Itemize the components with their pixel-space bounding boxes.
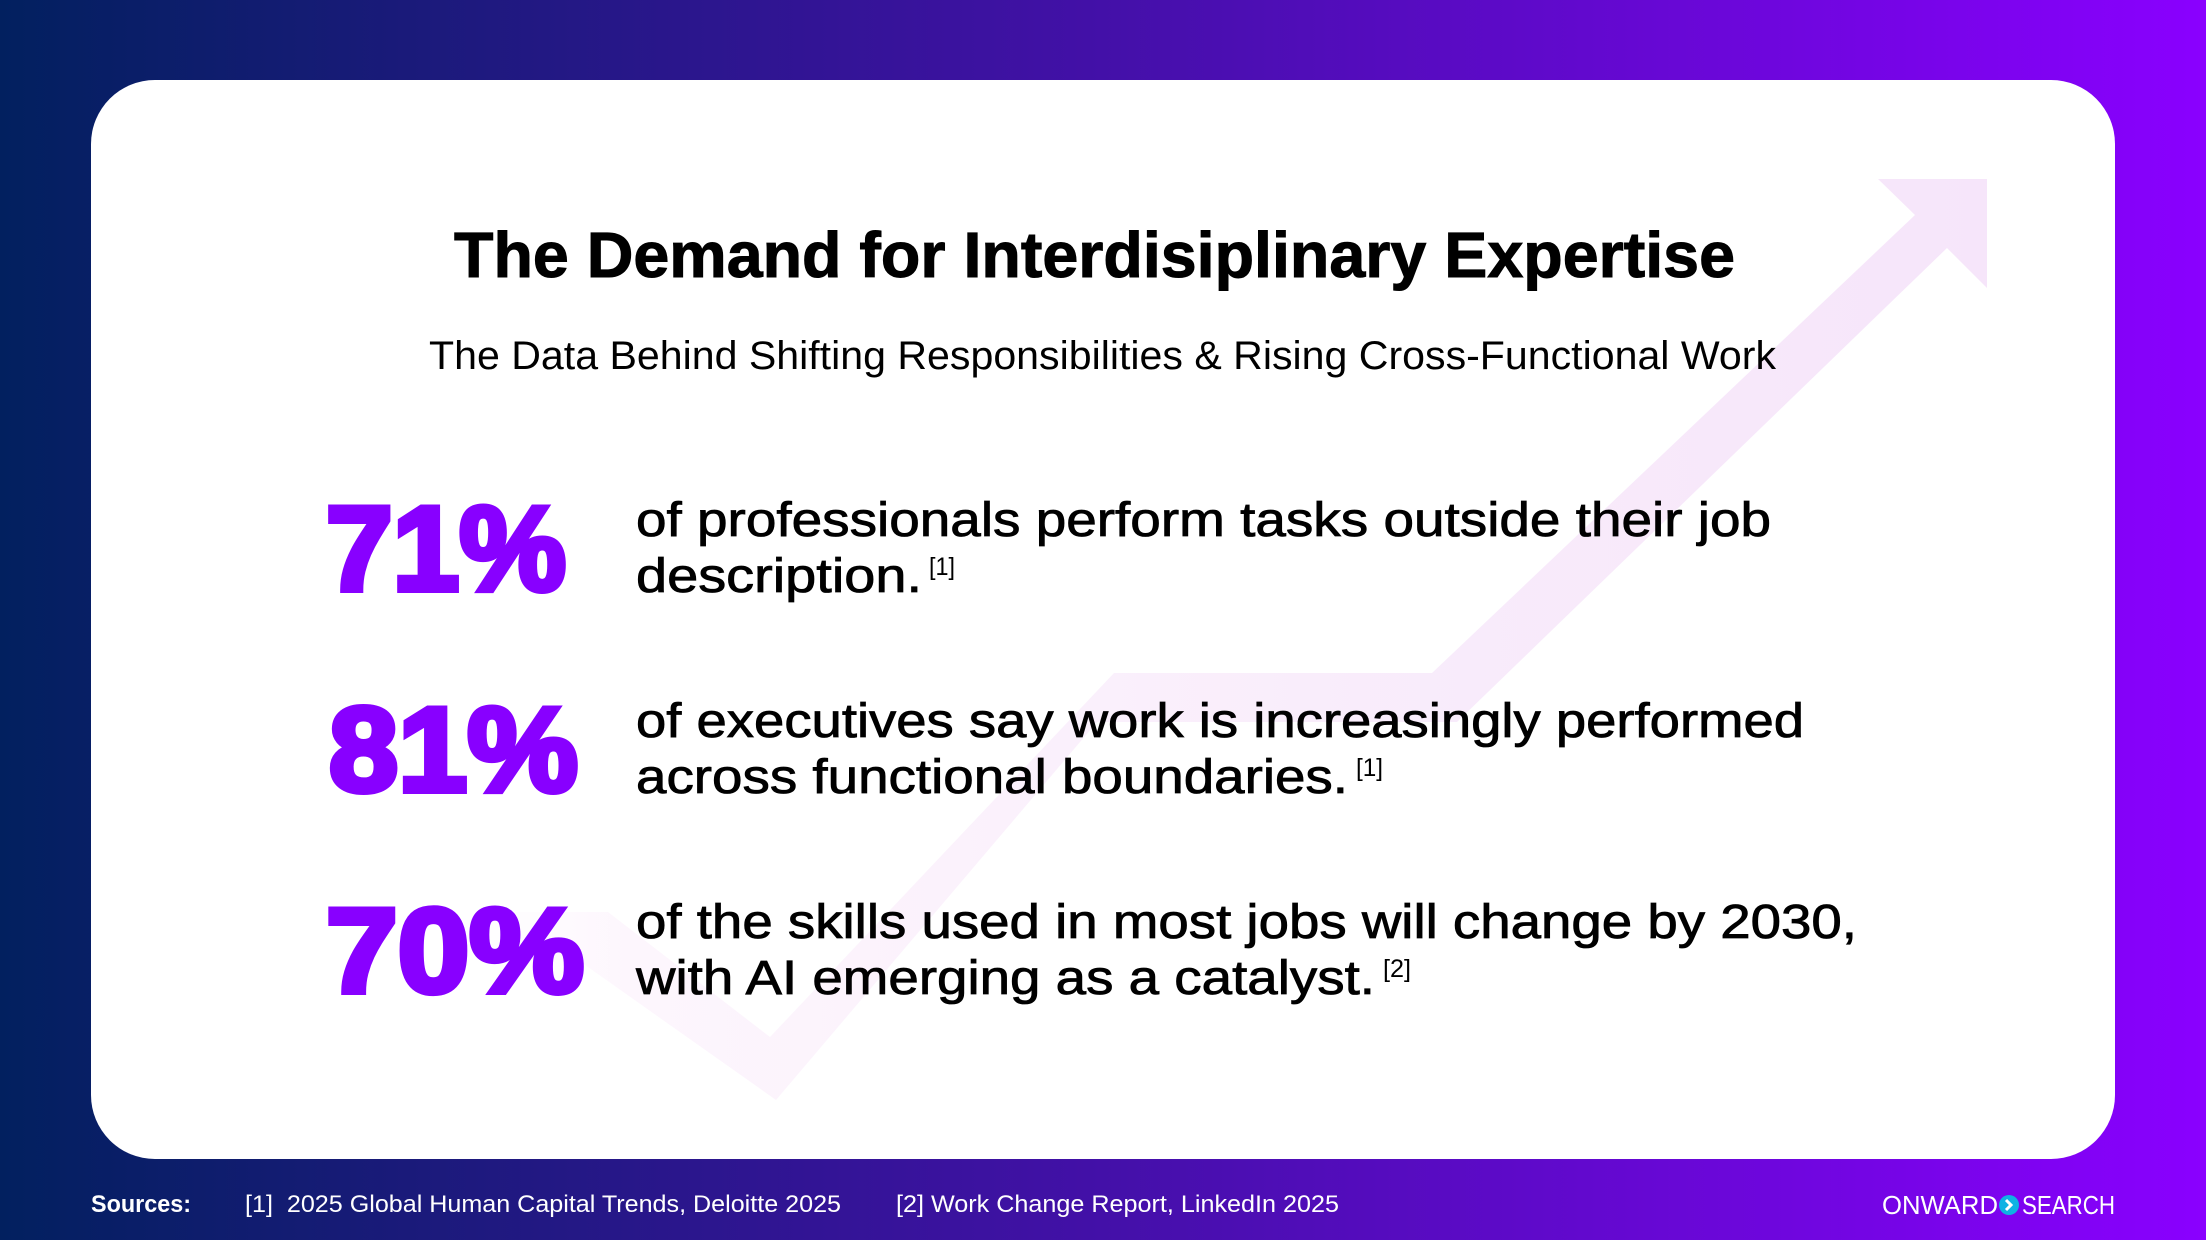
- stat text 70%: [635, 896, 1857, 1005]
- logo: Onward Search: [1882, 1190, 2115, 1220]
- stat text 70%: with AI emerging as a catalyst.: [635, 952, 1375, 1005]
- citation marker 3: [2]: [1383, 955, 1411, 983]
- stat: 81%: [329, 683, 1804, 817]
- citation marker 1: [1]: [929, 553, 955, 581]
- stat text 81%: of executives say work is increasingly performed: [636, 695, 1804, 748]
- logo word SEARCH: SEARCH: [2022, 1190, 2115, 1220]
- source 2: [2] Work Change Report, LinkedIn 2025: [896, 1191, 1339, 1218]
- sources label: Sources:: [91, 1191, 191, 1218]
- stat text 71%: of professionals perform tasks outside their job: [636, 494, 1771, 547]
- sources footer: [91, 1191, 1339, 1218]
- icon: rising arrow watermark: [480, 179, 1987, 1100]
- stat: 70%: [326, 884, 1857, 1018]
- white card panel: [91, 80, 2115, 1159]
- logo chevron circle: [1999, 1195, 2019, 1215]
- stat text 71%: description.: [636, 550, 922, 603]
- title: The Demand for Interdisiplinary Expertise: [454, 219, 1735, 291]
- stat text 70%: of the skills used in most jobs will change by 2030,: [636, 896, 1857, 949]
- stat number 70%: 70%: [326, 884, 584, 1018]
- stat text 81%: [636, 695, 1804, 804]
- stat number 81%: 81%: [329, 683, 578, 817]
- stat text 71%: [636, 494, 1771, 603]
- source 1: [1] 2025 Global Human Capital Trends, Deloitte 2025: [245, 1191, 841, 1218]
- stat: 71%: [326, 482, 1771, 616]
- stat number 71%: 71%: [326, 482, 566, 616]
- logo word ONWARD: ONWARD: [1882, 1190, 1998, 1220]
- stat text 81%: across functional boundaries.: [636, 751, 1348, 804]
- citation marker 2: [1]: [1356, 754, 1383, 782]
- subtitle: The Data Behind Shifting Responsibilities & Rising Cross-Functional Work: [429, 334, 1777, 378]
